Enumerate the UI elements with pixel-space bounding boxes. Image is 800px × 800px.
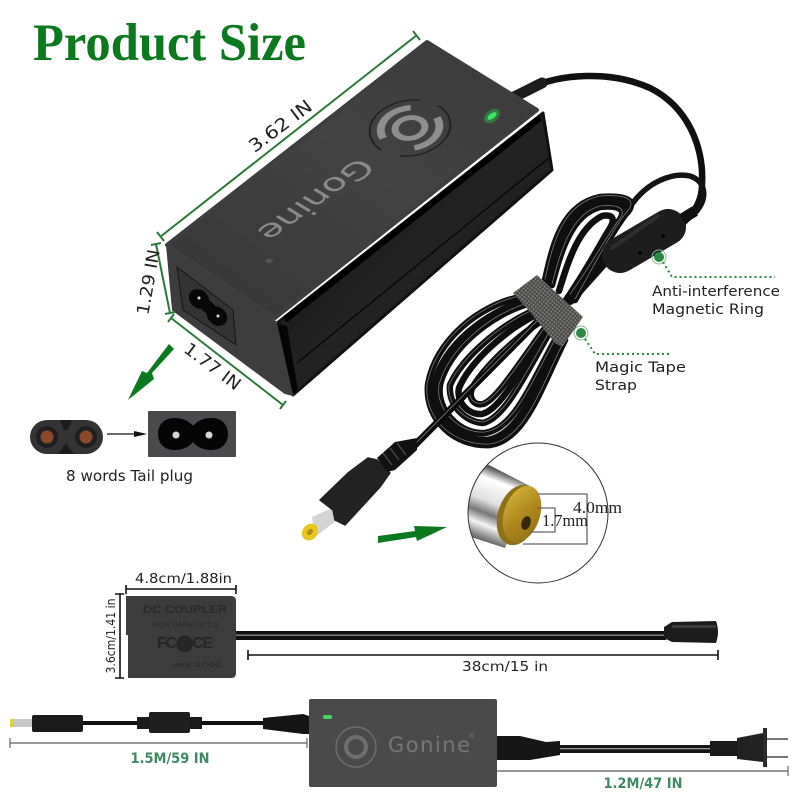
DC coupler dummy battery [126, 596, 236, 678]
title: Product Size [33, 14, 306, 72]
magic tape strap [513, 275, 583, 347]
power cord from adapter to ferrite [512, 76, 704, 222]
DC coupler dimension: width [126, 571, 236, 594]
1.7mm dimension [530, 508, 588, 532]
socket opening [185, 285, 231, 330]
full adapter: body [309, 699, 497, 787]
bevel edge [285, 118, 540, 320]
DC coupler dimension: height: 3.6cm/1.41 in [104, 598, 118, 674]
coiled cable bundle [412, 196, 631, 448]
arrow: down to tail plug [128, 344, 174, 400]
tail plug caption: 8 words Tail plug [66, 467, 193, 485]
icon: plug connector [30, 420, 103, 454]
cable length dimension 38cm: 38cm/15 in [462, 659, 548, 675]
callout: magic tape strap: Magic Tape [595, 360, 686, 376]
arrow: plug to socket [107, 431, 147, 437]
DC coupler dummy battery: MADE IN CHINA [173, 662, 223, 669]
dimension 1.5M/59 IN: 1.5M/59 IN [130, 751, 210, 767]
front face [167, 245, 293, 395]
DC coupler dummy battery: FOR DMW-DCC3 [153, 620, 218, 629]
brand name Gonine on adapter [249, 153, 382, 265]
side face [277, 113, 552, 395]
DC coupler dimension: width: 4.8cm/1.88in [135, 571, 232, 587]
icon: green LED [481, 106, 503, 126]
dimension: height 1.29 IN [133, 243, 175, 316]
full adapter: body: ® [468, 732, 475, 740]
DC coupler dimension: height [104, 594, 124, 678]
callout: magic tape strap: Strap [595, 378, 637, 394]
callout: magnetic ring: Magnetic Ring [652, 302, 764, 318]
callout: magic tape strap [574, 326, 686, 394]
DC coupler cable and connector [236, 621, 718, 643]
dimension: height 1.29 IN: 1.29 IN [133, 248, 165, 316]
dimension: length 3.62 IN [157, 31, 420, 241]
callout: magnetic ring: Anti-interference [652, 284, 780, 300]
logo [336, 727, 376, 767]
dimension: width 1.77 IN [168, 314, 286, 409]
DC coupler dummy battery: DC COUPLER [143, 604, 227, 616]
socket panel [177, 267, 236, 345]
brand name: Gonine [388, 733, 470, 757]
callout: magnetic ring [652, 250, 780, 318]
dimension: length 3.62 IN: 3.62 IN [245, 96, 317, 157]
full adapter: AC cord and plug [497, 728, 788, 767]
front corner [277, 323, 298, 395]
brand name Gonine on adapter: ® [262, 256, 276, 265]
brand name Gonine on adapter: Gonine [249, 153, 382, 246]
cable length dimension 38cm [248, 650, 718, 675]
icon: socket [148, 411, 236, 457]
dimension 1.5M/59 IN [10, 738, 307, 767]
brand logo on adapter [353, 88, 467, 168]
top face [167, 42, 537, 318]
dimension: width 1.77 IN: 1.77 IN [180, 339, 244, 395]
DC coupler dummy battery: FC⬤CE [157, 635, 213, 653]
4.0mm dimension: 4.0mm [573, 498, 622, 517]
full adapter: DC lead [10, 712, 309, 734]
plug tip detail circle [468, 442, 622, 584]
dimension 1.2M/47 IN: 1.2M/47 IN [604, 776, 682, 792]
arrow: plug to detail [378, 526, 447, 543]
side seam [297, 157, 550, 363]
1.7mm dimension: 1.7mm [542, 511, 588, 530]
adapter body [167, 42, 552, 395]
4.0mm dimension [523, 494, 622, 544]
ferrite magnetic ring [612, 211, 695, 255]
DC barrel plug [298, 438, 417, 544]
